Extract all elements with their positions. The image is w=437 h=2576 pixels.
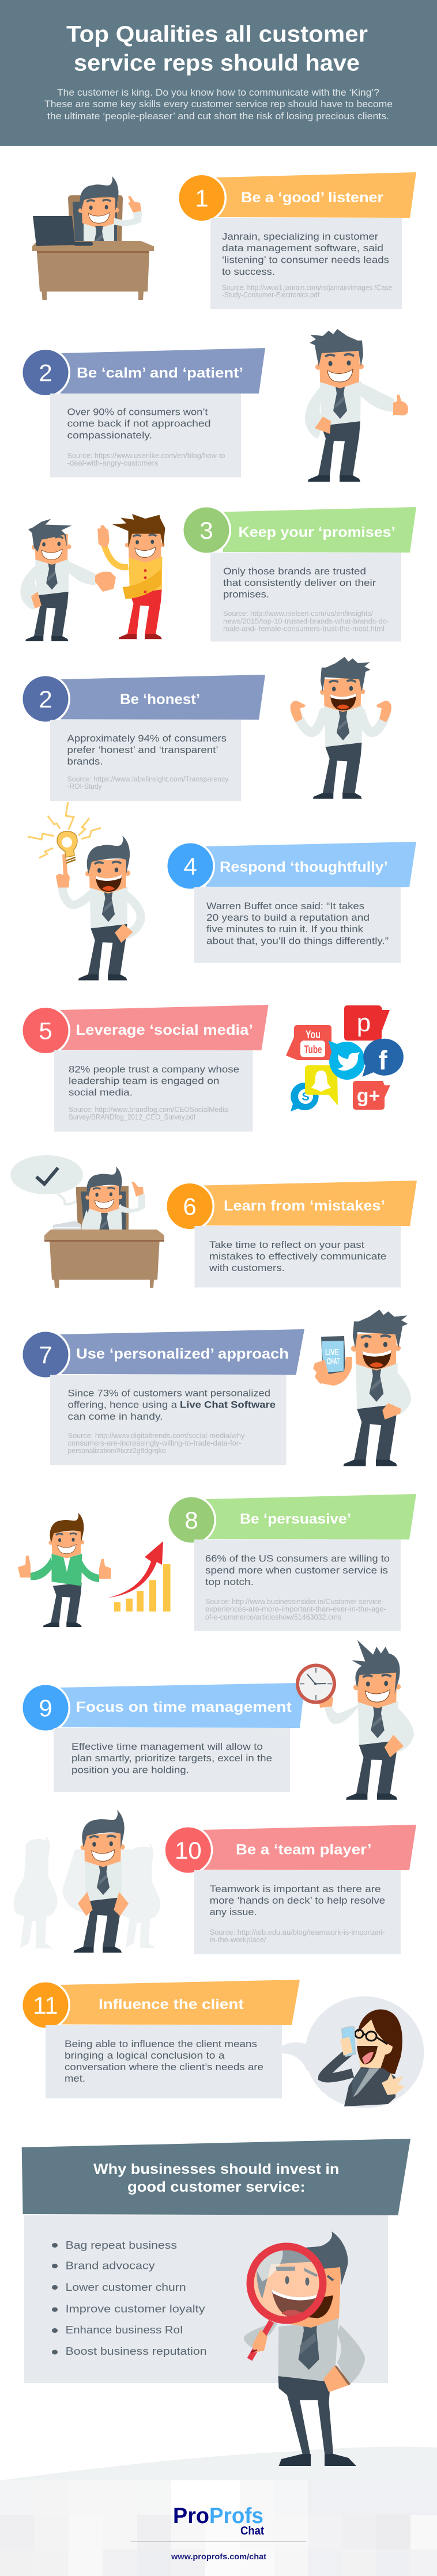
illustration: man thumbs up	[305, 329, 408, 482]
text box: Source: http://aib.edu.au/blog/teamwork-is-important-	[210, 1928, 385, 1936]
illustration: two men shaking hands	[20, 514, 165, 641]
footer logo: Chat	[240, 2525, 264, 2537]
intro text	[44, 87, 393, 122]
text box	[210, 553, 401, 642]
text box: to success.	[222, 266, 275, 277]
footer logo: Pro	[173, 2504, 209, 2528]
number badge	[165, 841, 215, 891]
text box: leadership team is engaged on	[69, 1075, 219, 1086]
text box: -deal-with-angry-customers	[67, 459, 158, 467]
text box: any issue.	[210, 1907, 257, 1917]
text box: Over 90% of consumers won’t	[67, 407, 208, 418]
icon: pinterest: p	[357, 1009, 371, 1037]
illustration: man at desk with laptop	[32, 176, 154, 300]
text box: spend more when customer service is	[205, 1565, 388, 1576]
illustration: man with both thumbs raised	[291, 657, 391, 799]
text box: 82% people trust a company whose	[69, 1064, 239, 1075]
text box: can come in handy.	[68, 1411, 163, 1422]
icon: snapchat	[305, 1065, 338, 1105]
heading banner	[201, 1825, 416, 1870]
header panel	[0, 0, 437, 146]
text box: mistakes to effectively communicate	[209, 1251, 386, 1262]
text box: brands.	[67, 756, 103, 767]
bullet list: Enhance business RoI	[66, 2324, 183, 2336]
text box: prefer ‘honest’ and ‘transparent’	[67, 744, 218, 755]
title	[66, 22, 368, 76]
text box: 66% of the US consumers are willing to	[205, 1553, 390, 1564]
text box	[50, 394, 241, 477]
intro text: the ultimate ‘people-pleaser’ and cut short the risk of losing precious clients.	[47, 111, 389, 122]
text box: top notch.	[205, 1576, 254, 1587]
number badge: 5	[39, 1017, 52, 1044]
panel: quality 8 persuasive	[18, 1494, 416, 1631]
illustration: man holding clock	[296, 1640, 414, 1800]
number badge: 10	[175, 1837, 202, 1864]
panel: quality 2 calm and patient	[21, 329, 408, 482]
text box: Live Chat Software	[180, 1399, 276, 1410]
icon: google plus	[353, 1081, 390, 1110]
illustration: man with idea light bulb	[28, 802, 141, 980]
number badge	[167, 1495, 216, 1545]
heading banner	[216, 172, 416, 218]
text box: position you are holding.	[71, 1764, 189, 1776]
illustration: man in green with growth chart	[18, 1512, 171, 1627]
panel: be honest	[21, 657, 391, 801]
text box: Source: http://www1.janrain.com/rs/janrain/images /Case	[222, 283, 392, 292]
text box: that consistently deliver on their	[223, 577, 376, 588]
illustration: man holding live chat phone	[313, 1310, 411, 1466]
icon: skype	[291, 1083, 319, 1111]
title: service reps should have	[74, 51, 360, 76]
text box: come back if not approached	[67, 418, 211, 429]
text box	[54, 1050, 253, 1132]
heading banner	[59, 1005, 269, 1050]
text box: compassionately.	[67, 430, 152, 441]
number badge: 7	[39, 1341, 52, 1368]
text box: consumers-are-increasingly-willing-to-trade-data-for-	[68, 1439, 241, 1447]
text box: social media.	[69, 1087, 133, 1098]
number badge: 2	[39, 360, 52, 386]
number badge	[177, 173, 227, 222]
text box	[194, 1539, 401, 1631]
panel: quality 6 learn from mistakes	[10, 1155, 417, 1288]
text box: personalization/#ixzz2g8dgrqko	[68, 1447, 166, 1455]
bullet list: Boost business reputation	[66, 2346, 207, 2357]
heading banner	[61, 675, 265, 720]
bullet list: Lower customer churn	[66, 2282, 186, 2293]
text box: experiences-are-more-important-than-ever-in-the-age-	[205, 1605, 386, 1613]
text box: Source: https://www.userlike.com/en/blog/how-to	[67, 452, 225, 460]
number badge: 8	[184, 1507, 198, 1534]
text box: met.	[65, 2073, 85, 2084]
heading: Use ‘personalized’ approach	[76, 1346, 289, 1362]
text box	[194, 887, 401, 963]
text box: Teamwork is important as there are	[210, 1883, 381, 1894]
text box: Source: http://www.brandfog.com/CEOSocialMedia	[69, 1106, 228, 1114]
footer logo: Profs	[209, 2504, 263, 2528]
panel: quality 10 team player	[14, 1810, 416, 1954]
illustration: man with magnifying glass	[244, 2231, 365, 2466]
footer logo	[173, 2504, 264, 2537]
text box: about that, you’ll do things differently.”	[206, 936, 389, 946]
number badge: 6	[183, 1193, 197, 1220]
text box: -Study-Consumer-Electronics.pdf	[222, 291, 319, 299]
number badge	[21, 1683, 70, 1733]
heading: Be ‘calm’ and ‘patient’	[77, 365, 243, 381]
number badge	[21, 674, 70, 724]
text box: offering, hence using a	[68, 1399, 178, 1410]
text box: 20 years to build a reputation and	[206, 912, 370, 923]
heading: Be a ‘good’ listener	[241, 190, 383, 206]
text box: Source: http://www.digitaltrends.com/social-media/why-	[68, 1432, 247, 1440]
growth arrow	[108, 1541, 163, 1598]
panel: quality 5 social media	[21, 1005, 404, 1132]
heading: Be ‘honest’	[120, 691, 200, 708]
text box: Warren Buffet once said: “It takes	[206, 901, 364, 911]
text box: Janrain, specializing in customer	[222, 231, 378, 242]
icon: google plus: g+	[357, 1085, 380, 1107]
number badge	[21, 1006, 70, 1056]
text box: -ROI-Study	[67, 782, 102, 790]
panel: quality 11 influence the client	[21, 1980, 424, 2108]
title: Top Qualities all customer	[66, 22, 368, 47]
footer url: www.proprofs.com/chat	[171, 2552, 266, 2561]
heading banner	[206, 842, 416, 887]
number badge: 4	[183, 853, 197, 880]
heading	[93, 2161, 339, 2195]
text box	[54, 1728, 290, 1792]
text box: Survey/BRANDfog_2012_CEO_Survey.pdf	[69, 1113, 195, 1121]
text box: Approximately 94% of consumers	[67, 733, 227, 744]
text box: in-the-workplace/	[210, 1936, 266, 1944]
intro text: The customer is king. Do you know how to communicate with the ‘King’?	[57, 87, 379, 98]
bullet list	[52, 2240, 207, 2357]
heading: Focus on time management	[76, 1699, 292, 1715]
text box	[46, 2025, 282, 2098]
panel: quality 3 keep promises	[20, 505, 416, 642]
footer background	[0, 2447, 437, 2576]
text box	[50, 1375, 286, 1465]
heading: Learn from ‘mistakes’	[224, 1198, 385, 1214]
icon: pinterest	[344, 1005, 390, 1041]
text box: Being able to influence the client means	[65, 2038, 257, 2049]
heading banner	[204, 1181, 417, 1226]
bullet list: Brand advocacy	[66, 2260, 155, 2272]
number badge	[163, 1825, 213, 1875]
text box: five minutes to ruin it. If you think	[206, 924, 364, 935]
text box: bringing a logical conclusion to a	[65, 2050, 225, 2061]
text box: of-e-commerce/articleshow/51463032.cms	[205, 1613, 341, 1621]
heading: Influence the client	[99, 1996, 244, 2013]
text box: Source: https://www.labelinsight.com/Transparency	[67, 775, 229, 783]
heading banner	[22, 2139, 410, 2215]
heading: Be a ‘team player’	[236, 1841, 371, 1858]
heading banner	[61, 348, 265, 394]
text box	[195, 1226, 401, 1287]
text box: Effective time management will allow to	[71, 1741, 263, 1752]
text box: Only those brands are trusted	[223, 566, 366, 577]
heading: Respond ‘thoughtfully’	[220, 859, 388, 875]
heading banner	[223, 507, 416, 553]
number badge	[21, 1330, 70, 1379]
text box: Source: http://www.businessinsider.in/Customer-service-	[205, 1598, 384, 1606]
text box: plan smartly, prioritize targets, excel in the	[71, 1753, 272, 1764]
heading banner	[59, 1329, 304, 1375]
panel: quality 9 time management	[21, 1640, 414, 1800]
heading: Be ‘persuasive’	[240, 1511, 351, 1527]
illustration: man with team silhouettes	[14, 1810, 160, 1953]
bullet list: Bag repeat business	[66, 2240, 177, 2251]
text box: ‘listening’ to consumer needs leads	[222, 255, 389, 265]
illustration: man holding live chat phone: LIVE	[325, 1348, 339, 1357]
heading: Why businesses should invest in	[93, 2161, 339, 2177]
text box	[210, 218, 402, 309]
heading banner	[206, 1494, 416, 1539]
text box	[50, 720, 241, 801]
icon: youtube: Tube	[304, 1044, 322, 1056]
number badge	[21, 348, 70, 398]
list background box	[24, 2215, 388, 2383]
icon: skype: S	[302, 1091, 310, 1103]
intro text: These are some key skills every customer service rep should have to become	[44, 99, 393, 109]
icons: social media bubbles	[286, 1005, 404, 1111]
number badge: 11	[33, 1992, 58, 2019]
number badge: 1	[195, 184, 209, 212]
illustration: woman on phone in speech bubble	[282, 1996, 424, 2108]
text box: conversation where the client’s needs are	[65, 2061, 263, 2072]
number badge: 9	[39, 1694, 52, 1722]
text box: news/2015/top-10-trusted-brands-what-brands-do-	[223, 618, 389, 626]
icon: youtube: You	[306, 1029, 321, 1041]
icon: facebook	[362, 1039, 404, 1077]
panel: quality 7 personalized approach	[21, 1310, 411, 1466]
text box: Since 73% of customers want personalized	[68, 1388, 270, 1399]
panel: why invest in customer service	[22, 2139, 410, 2383]
number badge: 2	[39, 686, 52, 713]
text box: promises.	[223, 589, 269, 600]
number badge	[21, 1980, 70, 2030]
panel: quality 1 good listener	[32, 172, 416, 309]
panel: quality 4 respond thoughtfully	[28, 802, 416, 980]
heading: good customer service:	[127, 2179, 306, 2195]
heading banner	[59, 1683, 305, 1728]
text box: more ‘hands on deck’ to help resolve	[210, 1895, 385, 1906]
number badge: 3	[199, 517, 213, 544]
illustration: man holding live chat phone: CHAT	[327, 1357, 340, 1367]
chart bars	[114, 1564, 171, 1612]
text box	[194, 1870, 401, 1954]
text box: data management software, said	[222, 243, 383, 254]
heading banner	[59, 1980, 300, 2025]
number badge	[182, 505, 231, 555]
heading: Leverage ‘social media’	[76, 1022, 253, 1038]
icon: twitter	[329, 1041, 365, 1080]
heading: Keep your ‘promises’	[239, 524, 395, 540]
bullet list: Improve customer loyalty	[66, 2303, 205, 2315]
icon: youtube	[286, 1025, 331, 1060]
icon: facebook: f	[378, 1045, 387, 1075]
text box: with customers.	[209, 1262, 285, 1273]
text box: Source: http://www.nielsen.com/us/en/insights/	[223, 610, 374, 618]
text box: male-and- female-consumers-trust-the-most.html	[223, 625, 385, 633]
illustration: man at desk with thought bubble	[10, 1155, 164, 1288]
number badge	[165, 1181, 214, 1231]
text box: Take time to reflect on your past	[209, 1239, 364, 1250]
